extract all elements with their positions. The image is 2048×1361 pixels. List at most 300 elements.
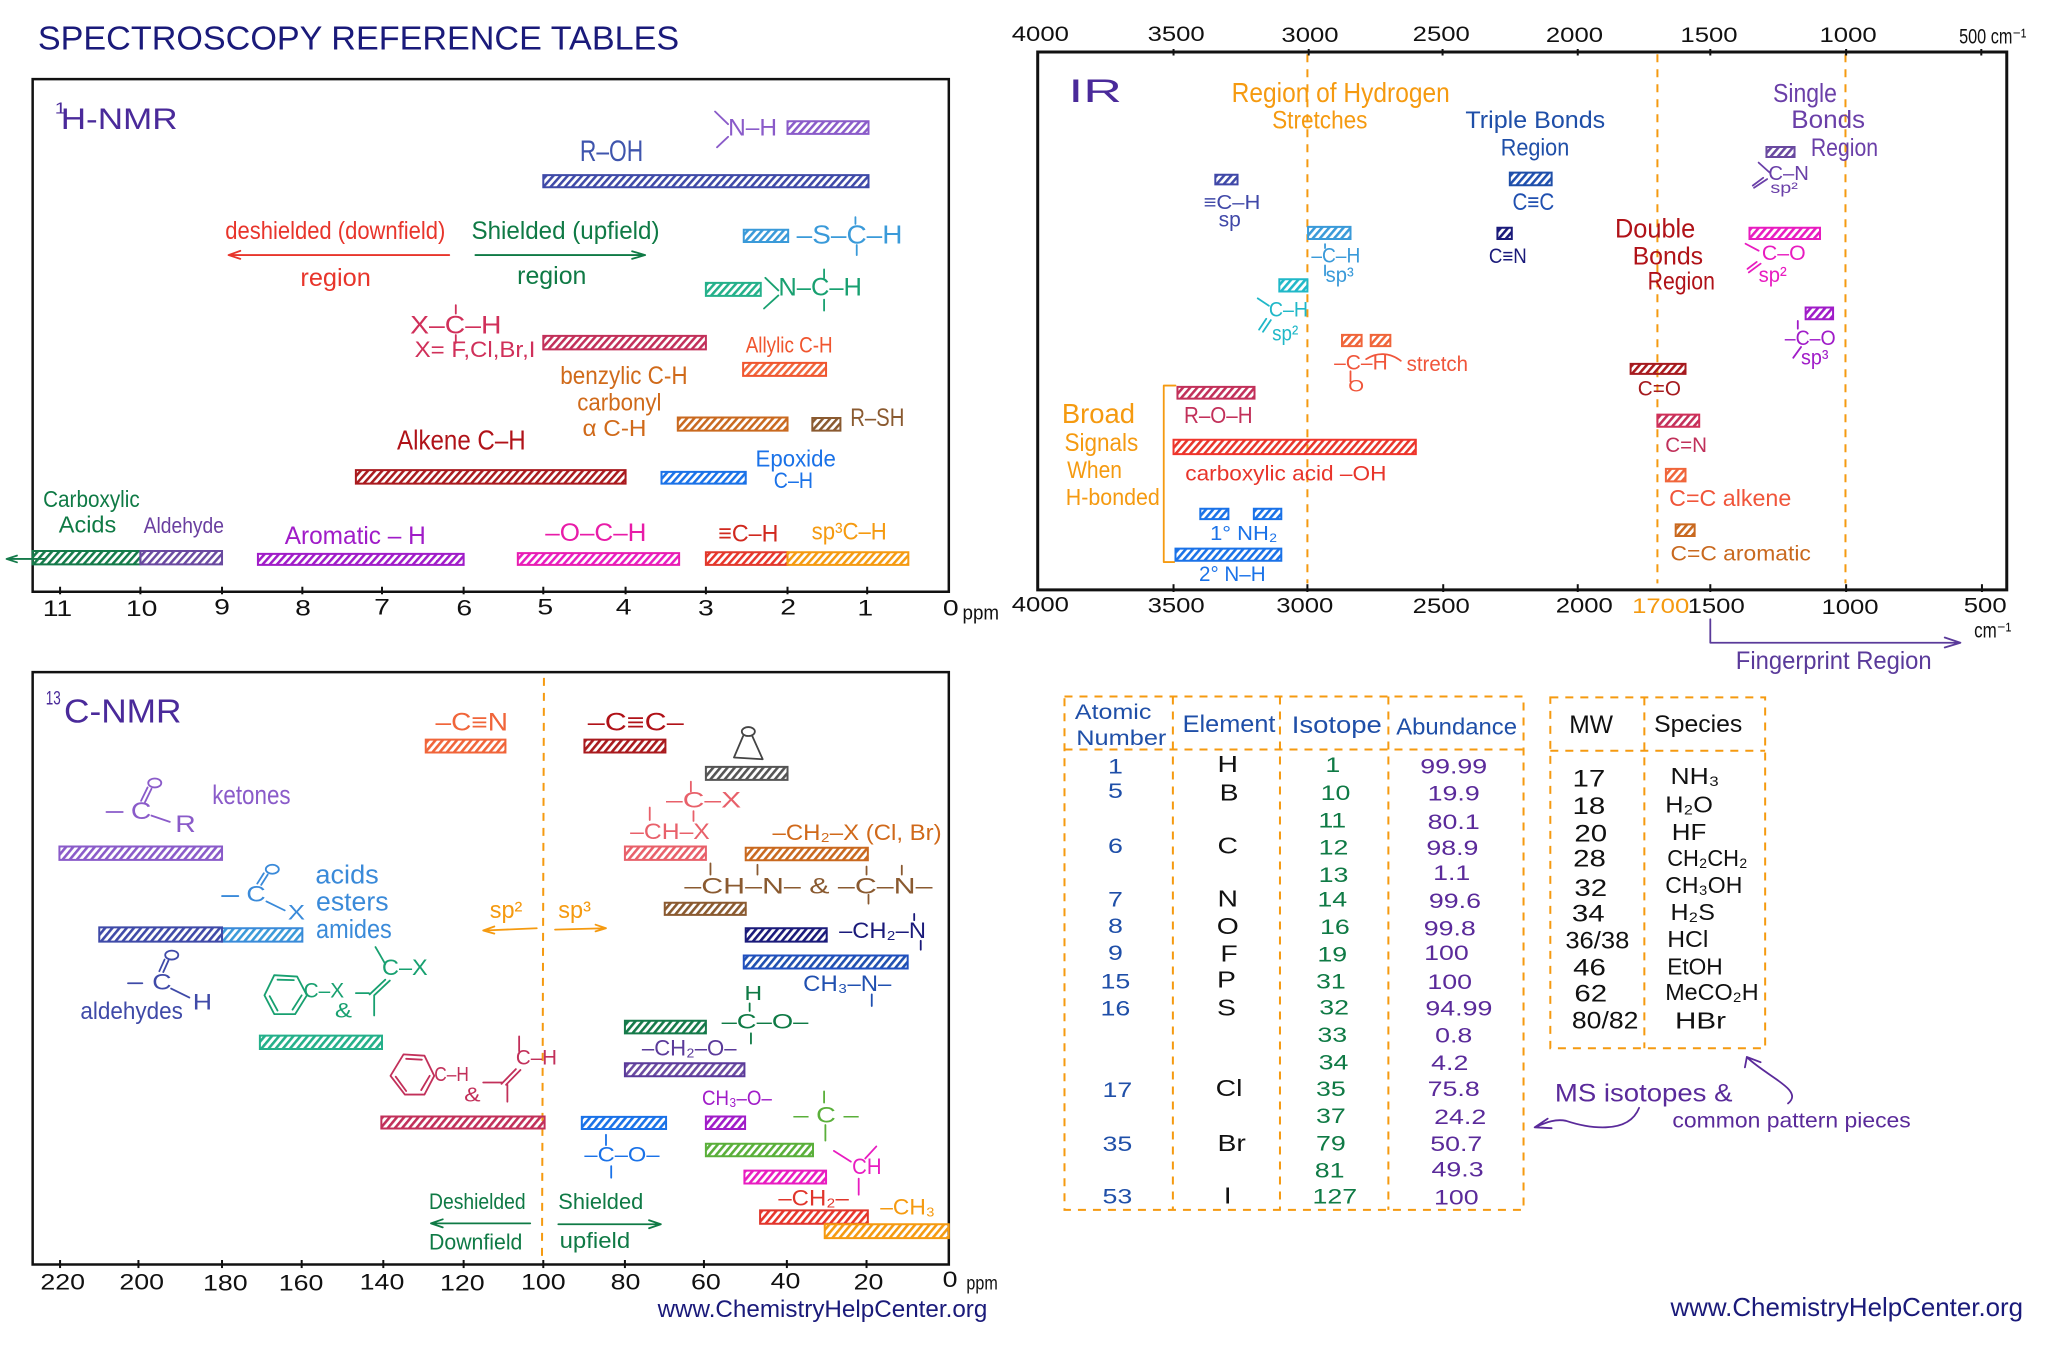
peak: CH-N and C-N: –CH–N– & –C–N– [684,873,933,898]
column: species: H₂O [1665,792,1713,818]
label: triple bonds region [1465,107,1605,161]
peak: alkyne: –C≡C– [588,708,685,736]
peak: nitrile [426,708,508,753]
peak: quaternary carbon [706,1091,859,1156]
peak: alkene C-H [356,425,626,484]
axis: ppm scale: 20 [854,1270,883,1295]
table: common pattern pieces [1550,697,1765,1048]
peak: sp2 C-N [1753,147,1809,197]
panel: IR [1012,23,2026,674]
column: atomic number: 7 [1108,888,1123,912]
peak: epoxide C-H [661,446,836,494]
peak: acids esters amides: C [246,882,266,907]
peak: epoxide [706,727,788,780]
axis: ppm scale: 180 [203,1271,248,1296]
annotation: MS isotopes and common pattern pieces [1555,1079,1911,1132]
peak: CH2 methylene: –CH₂– [778,1185,849,1210]
panel heading: IR: IR [1068,73,1122,109]
axis: ppm scale [40,1260,998,1296]
peak: secondary N-H: 2° N–H [1199,562,1266,586]
peak: N-C-H: N–C–H [778,272,862,301]
column: species: CH₂CH₂ [1667,846,1748,871]
axis: ppm scale: 220 [40,1270,85,1295]
peak: X-C-H halide: X–C–H [410,310,502,339]
axis: ppm scale: 7 [374,595,390,620]
label: deshielded downfield region [225,216,449,292]
peak: quaternary carbon: – C – [793,1103,859,1128]
bottom axis: wavenumbers: 3000 [1276,594,1333,617]
axis: ppm scale: 11 [43,597,72,621]
column: abundance: 99.99 [1420,755,1487,779]
bottom axis: wavenumbers: 3500 [1148,594,1205,617]
peak: acids esters amides: amides [316,915,392,944]
column: molecular weight: 62 [1574,980,1607,1007]
peak: alkyl halide: –C–X [666,788,742,812]
axis: ppm scale: 6 [456,596,472,621]
peak: allylic C-H: Allylic C-H [746,334,833,358]
column: abundance: 99.6 [1429,889,1481,913]
peak: sp C-H: ≡C–H [1204,192,1260,214]
column: isotope: 37 [1316,1104,1346,1128]
peak: aldehyde C-H stretch: O [1348,376,1364,395]
column: element: I [1224,1184,1232,1209]
peak: carboxylic acids: Carboxylic [43,487,140,513]
label: deshielded downfield: Downfield [429,1229,522,1254]
column: molecular weight [1565,765,1638,1034]
peak: sp3 C-H: sp³ [1326,263,1354,287]
peak: sp3 C-O [1785,307,1836,369]
peak: aldehyde C-H stretch: stretch [1407,352,1468,376]
peak: benzylic and carbonyl alpha C-H: α C-H [582,416,646,441]
label: double bonds region: Region [1648,267,1715,295]
label: single bonds region: Region [1811,133,1878,162]
peak: CH2-X: –CH₂–X (Cl, Br) [772,820,942,845]
peak: primary NH2: 1° NH₂ [1210,523,1277,545]
peak: sp C-H [1204,175,1260,231]
label: region of hydrogen stretches [1232,76,1450,134]
peak: R-OH [543,135,868,187]
column: isotope: 127 [1313,1185,1357,1209]
column: element: Cl [1216,1076,1242,1101]
axis: ppm scale: 100 [521,1270,566,1295]
peak: epoxide C-H: Epoxide [756,446,836,472]
peak: S-C-H [744,217,902,255]
axis: ppm scale: 8 [295,596,311,621]
peak: carboxylic acid OH: carboxylic acid –OH [1185,462,1386,485]
label: broad signals when H-bonded: Broad [1062,397,1135,429]
column: element: N [1217,887,1238,912]
peak: benzylic and carbonyl alpha C-H: benzylic C-H [560,361,688,389]
column: isotope: 81 [1315,1159,1344,1183]
peak: sp C-H: sp [1219,207,1241,231]
column: species: HBr [1675,1008,1726,1034]
column: element: B [1220,781,1239,806]
peak: H-C-O [625,981,808,1044]
column: abundance: 75.8 [1428,1077,1480,1101]
column: isotope: 12 [1319,836,1348,860]
column: abundance: 24.2 [1434,1105,1486,1129]
column: isotope: 79 [1316,1132,1346,1156]
label: deshielded downfield region: region [300,263,371,292]
column: species: EtOH [1667,954,1723,980]
column: species: HCl [1667,927,1708,953]
column: isotope: 14 [1317,888,1347,912]
peak: carboxylic acids [7,487,140,564]
label: region of hydrogen stretches: Stretches [1272,106,1367,134]
table header [1569,710,1742,738]
peak: C=N: C=N [1665,432,1707,457]
column: abundance: 99.8 [1424,917,1476,941]
peak: CH-N and C-N [665,863,933,915]
peak: N-C-H [706,269,862,311]
peak: benzylic and carbonyl alpha C-H: carbonyl [577,388,661,416]
column: atomic number: 35 [1102,1133,1132,1157]
peak: X-C-H halide [410,305,706,362]
column: isotope: 10 [1321,781,1350,805]
arrow: sp2 region: sp² [490,897,522,924]
bottom axis: wavenumbers: 1700 [1632,595,1689,618]
peak: aromatic and alkene C-H: & [464,1083,481,1106]
axis: ppm scale: 120 [440,1271,485,1296]
peak: acids esters amides: X [288,901,305,925]
column: atomic number: 9 [1108,941,1123,965]
peak: nitrile: –C≡N [436,708,508,736]
arrow: fingerprint region [1710,619,1960,674]
column: molecular weight: 80/82 [1572,1008,1638,1034]
peak: X-C-H halide: X= F,Cl,Br,I [415,338,535,362]
bottom axis: wavenumbers [1012,584,2011,642]
axis: ppm scale: 10 [126,597,157,621]
table header: Isotope [1292,712,1382,738]
column: atomic number: 5 [1108,779,1123,803]
peak: sp3 C-O: –C–O [1785,325,1836,349]
column: species [1665,764,1759,1034]
peak: CH methine [744,1146,882,1195]
title: SPECTROSCOPY REFERENCE TABLES [38,20,679,57]
peak: carboxylic acid OH [1174,440,1416,485]
peak: CH2-X [746,820,942,860]
label: double bonds region [1615,214,1715,295]
column: atomic number: 1 [1108,755,1123,779]
peak: aldehyde C-H stretch [1334,335,1468,395]
label: broad signals when H-bonded: H-bonded [1066,485,1160,511]
axis: ppm scale: ppm [963,601,999,624]
peak: R-SH [812,403,904,431]
table header: Element [1183,711,1276,738]
peak: CH3 methyl: –CH₃ [880,1194,935,1219]
column: isotope: 1 [1325,753,1340,777]
axis: ppm scale: 9 [214,595,230,620]
label: single bonds region [1773,79,1878,162]
label: double bonds region: Bonds [1633,242,1703,270]
top axis: wavenumbers: 3500 [1148,23,1205,46]
peak: C triple bond N [1489,228,1527,268]
column: isotope: 19 [1317,943,1347,967]
label: shielded upfield [558,1189,661,1253]
axis: ppm scale: 60 [691,1270,721,1295]
peak: R-O-H: R–O–H [1184,403,1253,428]
column: element: Br [1218,1132,1246,1157]
axis: ppm scale: 4 [616,595,632,620]
peak: aldehyde C-H stretch: –C–H [1334,351,1388,374]
label: single bonds region: Bonds [1791,105,1865,133]
annotation: MS isotopes and common pattern pieces: MS isotopes & [1555,1079,1733,1107]
bottom axis: wavenumbers: cm⁻¹ [1974,619,2011,642]
column: isotope: 32 [1319,996,1349,1020]
label: region of hydrogen stretches: Region of Hydrogen [1232,76,1450,108]
peak: ketones: C [131,797,151,825]
peak: C=C aromatic: C=C aromatic [1670,541,1811,565]
peak: benzylic and carbonyl alpha C-H [560,361,788,441]
top axis: wavenumbers: 2500 [1413,23,1470,46]
peak: CH3-N: CH₃–N– [803,971,892,996]
column: isotope: 33 [1317,1023,1347,1047]
peak: sp3 C-H: –C–H [1311,243,1360,267]
table header: Abundance [1396,714,1517,740]
axis: ppm scale: 0 [943,1268,958,1292]
bottom axis: wavenumbers: 1500 [1688,595,1745,618]
peak: aromatic H: Aromatic – H [285,521,426,550]
column: species: CH₃OH [1665,872,1742,898]
peak: aromatic and alkene C-X: C–X [304,978,344,1002]
peak: C=O: C=O [1638,376,1681,400]
column: molecular weight: 34 [1572,900,1605,927]
peak: sp2 C-O: sp² [1759,262,1787,287]
peak: aromatic and alkene C-H: C–H [434,1064,469,1086]
peak: sp3 C-O: sp³ [1801,346,1829,369]
peak: alkyne C-H [706,519,788,565]
peak: CH methine: CH [852,1154,882,1179]
bottom axis: wavenumbers: 2500 [1413,595,1470,618]
peak: alkyl halide [625,782,742,860]
bottom axis: wavenumbers: 2000 [1556,594,1613,617]
axis: ppm scale [43,587,999,624]
label: shielded upfield region: Shielded (upfield) [471,216,660,244]
column: element [1216,752,1246,1209]
table header [1075,700,1517,750]
peak: C=C alkene [1666,469,1791,512]
peak: C=C alkene: C=C alkene [1669,486,1791,512]
peak: C triple bond C: C≡C [1512,189,1554,215]
panel heading: 1H-NMR: 1 [55,99,66,117]
website link: www.ChemistryHelpCenter.org [657,1296,987,1323]
column: molecular weight: 36/38 [1565,927,1629,954]
column: molecular weight: 17 [1572,765,1605,792]
panel heading: 1H-NMR: H-NMR [61,103,178,136]
peak: aromatic and alkene C-H: C–H [516,1045,557,1069]
column: species: MeCO₂H [1665,980,1759,1006]
column: isotope: 13 [1319,863,1348,887]
axis: ppm scale: 3 [698,596,714,621]
peak: sp2 C-N: sp² [1770,180,1798,197]
peak: H-C-O: –C–O– [722,1009,808,1033]
panel: 1H-NMR [7,79,999,624]
column: abundance: 49.3 [1432,1158,1484,1182]
column: abundance: 50.7 [1430,1133,1482,1157]
bottom axis: wavenumbers: 500 [1964,594,2007,617]
label: shielded upfield region [471,216,660,289]
peak: aldehyde: Aldehyde [144,514,224,538]
column: atomic number: 53 [1102,1185,1132,1209]
column: isotope: 31 [1316,970,1346,994]
peak: C-O sp3 blue [582,1117,666,1178]
column: abundance: 4.2 [1431,1051,1468,1075]
peak: sp3 C-H: sp³C–H [812,517,887,545]
peak: alkene C-H: Alkene C–H [397,425,526,456]
column: species: H₂S [1670,900,1715,926]
peak: alkyne [584,708,685,753]
column: molecular weight: 20 [1574,820,1607,847]
label: broad signals when H-bonded: When [1067,457,1122,483]
table header: Atomic [1075,700,1151,724]
table: MS isotopes [1064,697,1524,1210]
top axis: wavenumbers: 1000 [1820,23,1877,47]
peak: N-H: N–H [728,113,777,141]
peak: C triple bond C [1510,173,1554,215]
peak: ketones [59,778,291,860]
peak: CH2-N: –CH₂–N [839,918,926,943]
peak: secondary N-H [1175,549,1281,586]
column: species: HF [1672,819,1706,845]
column: element: F [1220,942,1238,967]
column: atomic number: 6 [1108,834,1123,858]
arrow: sp3 region: sp³ [558,897,591,924]
table header: MW [1569,710,1614,738]
axis: ppm scale: ppm [966,1273,998,1294]
arrow: to pattern table [1745,1057,1792,1103]
column: abundance: 98.9 [1426,836,1478,860]
peak: C-O sp3 blue: –C–O– [584,1142,660,1166]
peak: C=C aromatic [1670,524,1811,565]
peak: H-C-O: H [744,981,762,1004]
column: isotope: 11 [1318,809,1346,833]
peak: CH3 methyl [825,1194,949,1238]
peak: sp2 C-H: sp² [1272,322,1298,345]
top axis: wavenumbers: 1500 [1680,23,1738,47]
peak: sp2 C-O: C–O [1762,241,1806,265]
peak: sp2 C-N: C–N [1768,163,1809,185]
column: element: S [1217,996,1236,1021]
label: triple bonds region: Region [1501,134,1569,161]
top axis: wavenumbers: 3000 [1281,23,1339,47]
column: atomic number [1101,755,1132,1209]
peak: aromatic and alkene C-X [260,947,428,1049]
column: molecular weight: 32 [1574,874,1607,901]
panel: isotope and pattern tables [1064,697,2023,1323]
peak: R-O-H [1177,387,1255,428]
column: element: H [1217,752,1238,777]
arrow: sp2 region [483,897,537,934]
column: abundance: 94.99 [1425,997,1492,1021]
column: abundance: 1.1 [1433,861,1470,885]
column: abundance: 19.9 [1428,782,1480,806]
peak: alkyne C-H: ≡C–H [718,519,778,547]
peak: CH3-O [702,1086,772,1129]
axis: ppm scale: 160 [279,1271,323,1296]
peak: allylic C-H [743,334,833,376]
column: abundance: 100 [1424,941,1469,965]
peak: N-H [715,112,868,147]
label: deshielded downfield: Deshielded [429,1189,526,1214]
peak: R-OH: R–OH [580,135,643,168]
bottom axis: wavenumbers: 1000 [1821,595,1879,619]
column: isotope [1313,753,1357,1209]
peak: CH2-O [625,1036,744,1076]
peak: aldehydes: aldehydes [80,998,183,1025]
label: shielded upfield: upfield [560,1228,630,1253]
peak: aromatic and alkene C-X: & [335,1000,352,1023]
panel heading: 1H-NMR [55,99,178,136]
column: abundance [1420,755,1492,1210]
axis: ppm scale: 40 [771,1270,800,1294]
panel heading: 13C-NMR [46,688,182,730]
peak: C=O [1631,364,1685,400]
column: molecular weight: 18 [1572,792,1605,819]
label: single bonds region: Single [1773,79,1837,108]
column: atomic number: 16 [1101,997,1130,1021]
peak: CH3-O: CH₃–O– [702,1086,772,1110]
annotation: MS isotopes and common pattern pieces: common pattern pieces [1672,1109,1911,1132]
axis: ppm scale: 1 [857,596,873,621]
peak: ketones: R [175,810,196,838]
peak: sp3 C-H [1308,227,1360,287]
axis: ppm scale: 2 [780,595,796,620]
peak: acids esters amides: esters [316,887,389,916]
column: isotope: 34 [1319,1051,1348,1075]
peak: CH2-O: –CH₂–O– [642,1036,737,1060]
peak: carboxylic acids: Acids [59,513,116,538]
peak: aldehydes: H [193,991,212,1015]
label: broad signals when H-bonded [1062,386,1175,562]
column: isotope: 16 [1320,915,1350,939]
top axis: wavenumbers: 2000 [1546,23,1603,47]
label: double bonds region: Double [1615,214,1695,244]
peak: epoxide C-H: C–H [774,469,813,494]
label: triple bonds region: Triple Bonds [1465,107,1605,133]
peak: O-C-H: –O–C–H [545,518,646,546]
column: species: NH₃ [1670,764,1719,790]
column: atomic number: 17 [1102,1078,1132,1102]
peak: CH2-N [746,914,926,950]
axis: ppm scale: 0 [943,596,959,621]
column: abundance: 80.1 [1428,810,1480,834]
label: broad signals when H-bonded: Signals [1064,428,1138,457]
peak: aromatic and alkene C-X: C–X [382,955,428,980]
table header: Species [1654,711,1742,738]
peak: aldehydes [80,927,222,1025]
peak: sp2 C-H: C–H [1269,298,1308,321]
peak: C triple bond N: C≡N [1489,244,1527,268]
label: shielded upfield region: region [517,261,586,289]
column: abundance: 100 [1434,1186,1479,1210]
peak: aldehydes: C [152,970,172,995]
label: shielded upfield: Shielded [558,1189,643,1214]
peak: alkyl halide: –CH–X [630,819,710,844]
column: element: C [1217,834,1238,859]
column: atomic number: 8 [1108,914,1123,939]
peak: sp2 C-O [1746,228,1820,287]
bottom axis: wavenumbers: 4000 [1012,593,1069,616]
column: element: P [1217,968,1236,993]
peak: acids esters amides [222,860,392,944]
top axis: wavenumbers: 4000 [1012,23,1069,46]
axis: ppm scale: 200 [119,1270,164,1295]
column: isotope: 35 [1316,1077,1346,1101]
peak: C=N [1657,415,1707,457]
top axis: wavenumbers [1012,23,2026,56]
column: molecular weight: 46 [1573,954,1606,981]
peak: CH3-N [744,956,908,1006]
